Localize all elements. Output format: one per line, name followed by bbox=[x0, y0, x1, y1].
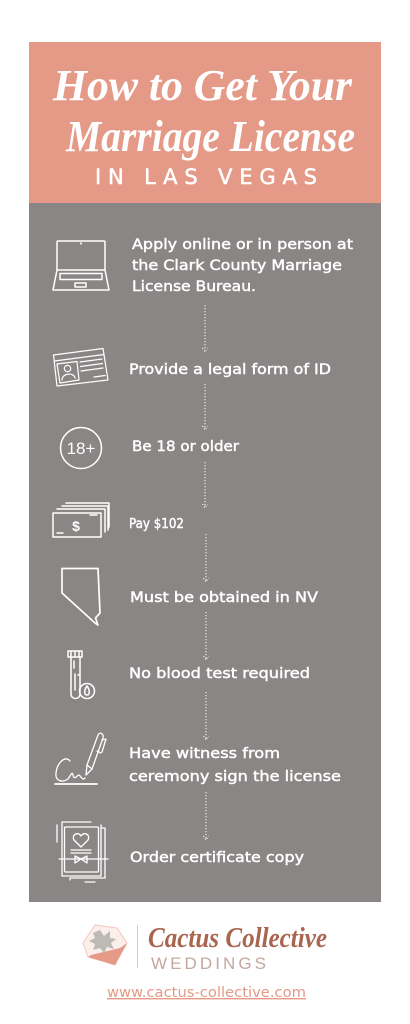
divider bbox=[136, 925, 138, 968]
step text: pay: Pay $102 bbox=[129, 516, 184, 532]
website link: www.cactus-collective.com bbox=[107, 985, 306, 1001]
step text: witness: Have witness from bbox=[129, 746, 280, 762]
icon: money bbox=[53, 503, 109, 537]
icon: pen signature bbox=[55, 733, 106, 784]
step text: age: Be 18 or older bbox=[132, 439, 239, 455]
subtitle: IN LAS VEGAS bbox=[95, 165, 317, 189]
icon: 18+ bbox=[60, 428, 102, 468]
arrow bbox=[204, 692, 208, 740]
icon: logo gem bbox=[83, 925, 127, 965]
icon: laptop bbox=[53, 241, 109, 290]
arrow bbox=[202, 462, 208, 508]
panel: header bbox=[29, 42, 381, 203]
icon: money: $ bbox=[72, 518, 80, 534]
title: How to Get Your bbox=[52, 61, 353, 110]
step text: apply bbox=[132, 237, 353, 295]
step text: certificate: Order certificate copy bbox=[130, 850, 304, 866]
arrow bbox=[202, 384, 208, 430]
panel: steps bbox=[29, 203, 381, 902]
brand subtitle: WEDDINGS bbox=[151, 954, 266, 973]
step text: witness bbox=[129, 746, 341, 785]
step text: ID: Provide a legal form of ID bbox=[129, 362, 331, 378]
step text: apply: License Bureau. bbox=[132, 279, 256, 295]
icon: test tube bbox=[68, 651, 94, 698]
icon: certificate bbox=[57, 822, 108, 882]
step text: apply: the Clark County Marriage bbox=[132, 258, 342, 274]
icon: 18+: 18+ bbox=[67, 439, 95, 458]
step text: witness: ceremony sign the license bbox=[129, 769, 341, 785]
logo bbox=[83, 922, 327, 1001]
icon: Nevada bbox=[62, 568, 100, 625]
step text: blood test: No blood test required bbox=[129, 666, 310, 682]
arrow bbox=[204, 534, 208, 582]
step text: Nevada: Must be obtained in NV bbox=[130, 590, 318, 606]
brand name: Cactus Collective bbox=[148, 922, 327, 954]
arrow bbox=[204, 612, 208, 660]
title bbox=[52, 61, 355, 161]
arrow bbox=[202, 305, 208, 352]
icon: ID card bbox=[54, 348, 108, 386]
arrow bbox=[204, 792, 208, 840]
step text: apply: Apply online or in person at bbox=[132, 237, 353, 253]
title: Marriage License bbox=[65, 112, 355, 161]
